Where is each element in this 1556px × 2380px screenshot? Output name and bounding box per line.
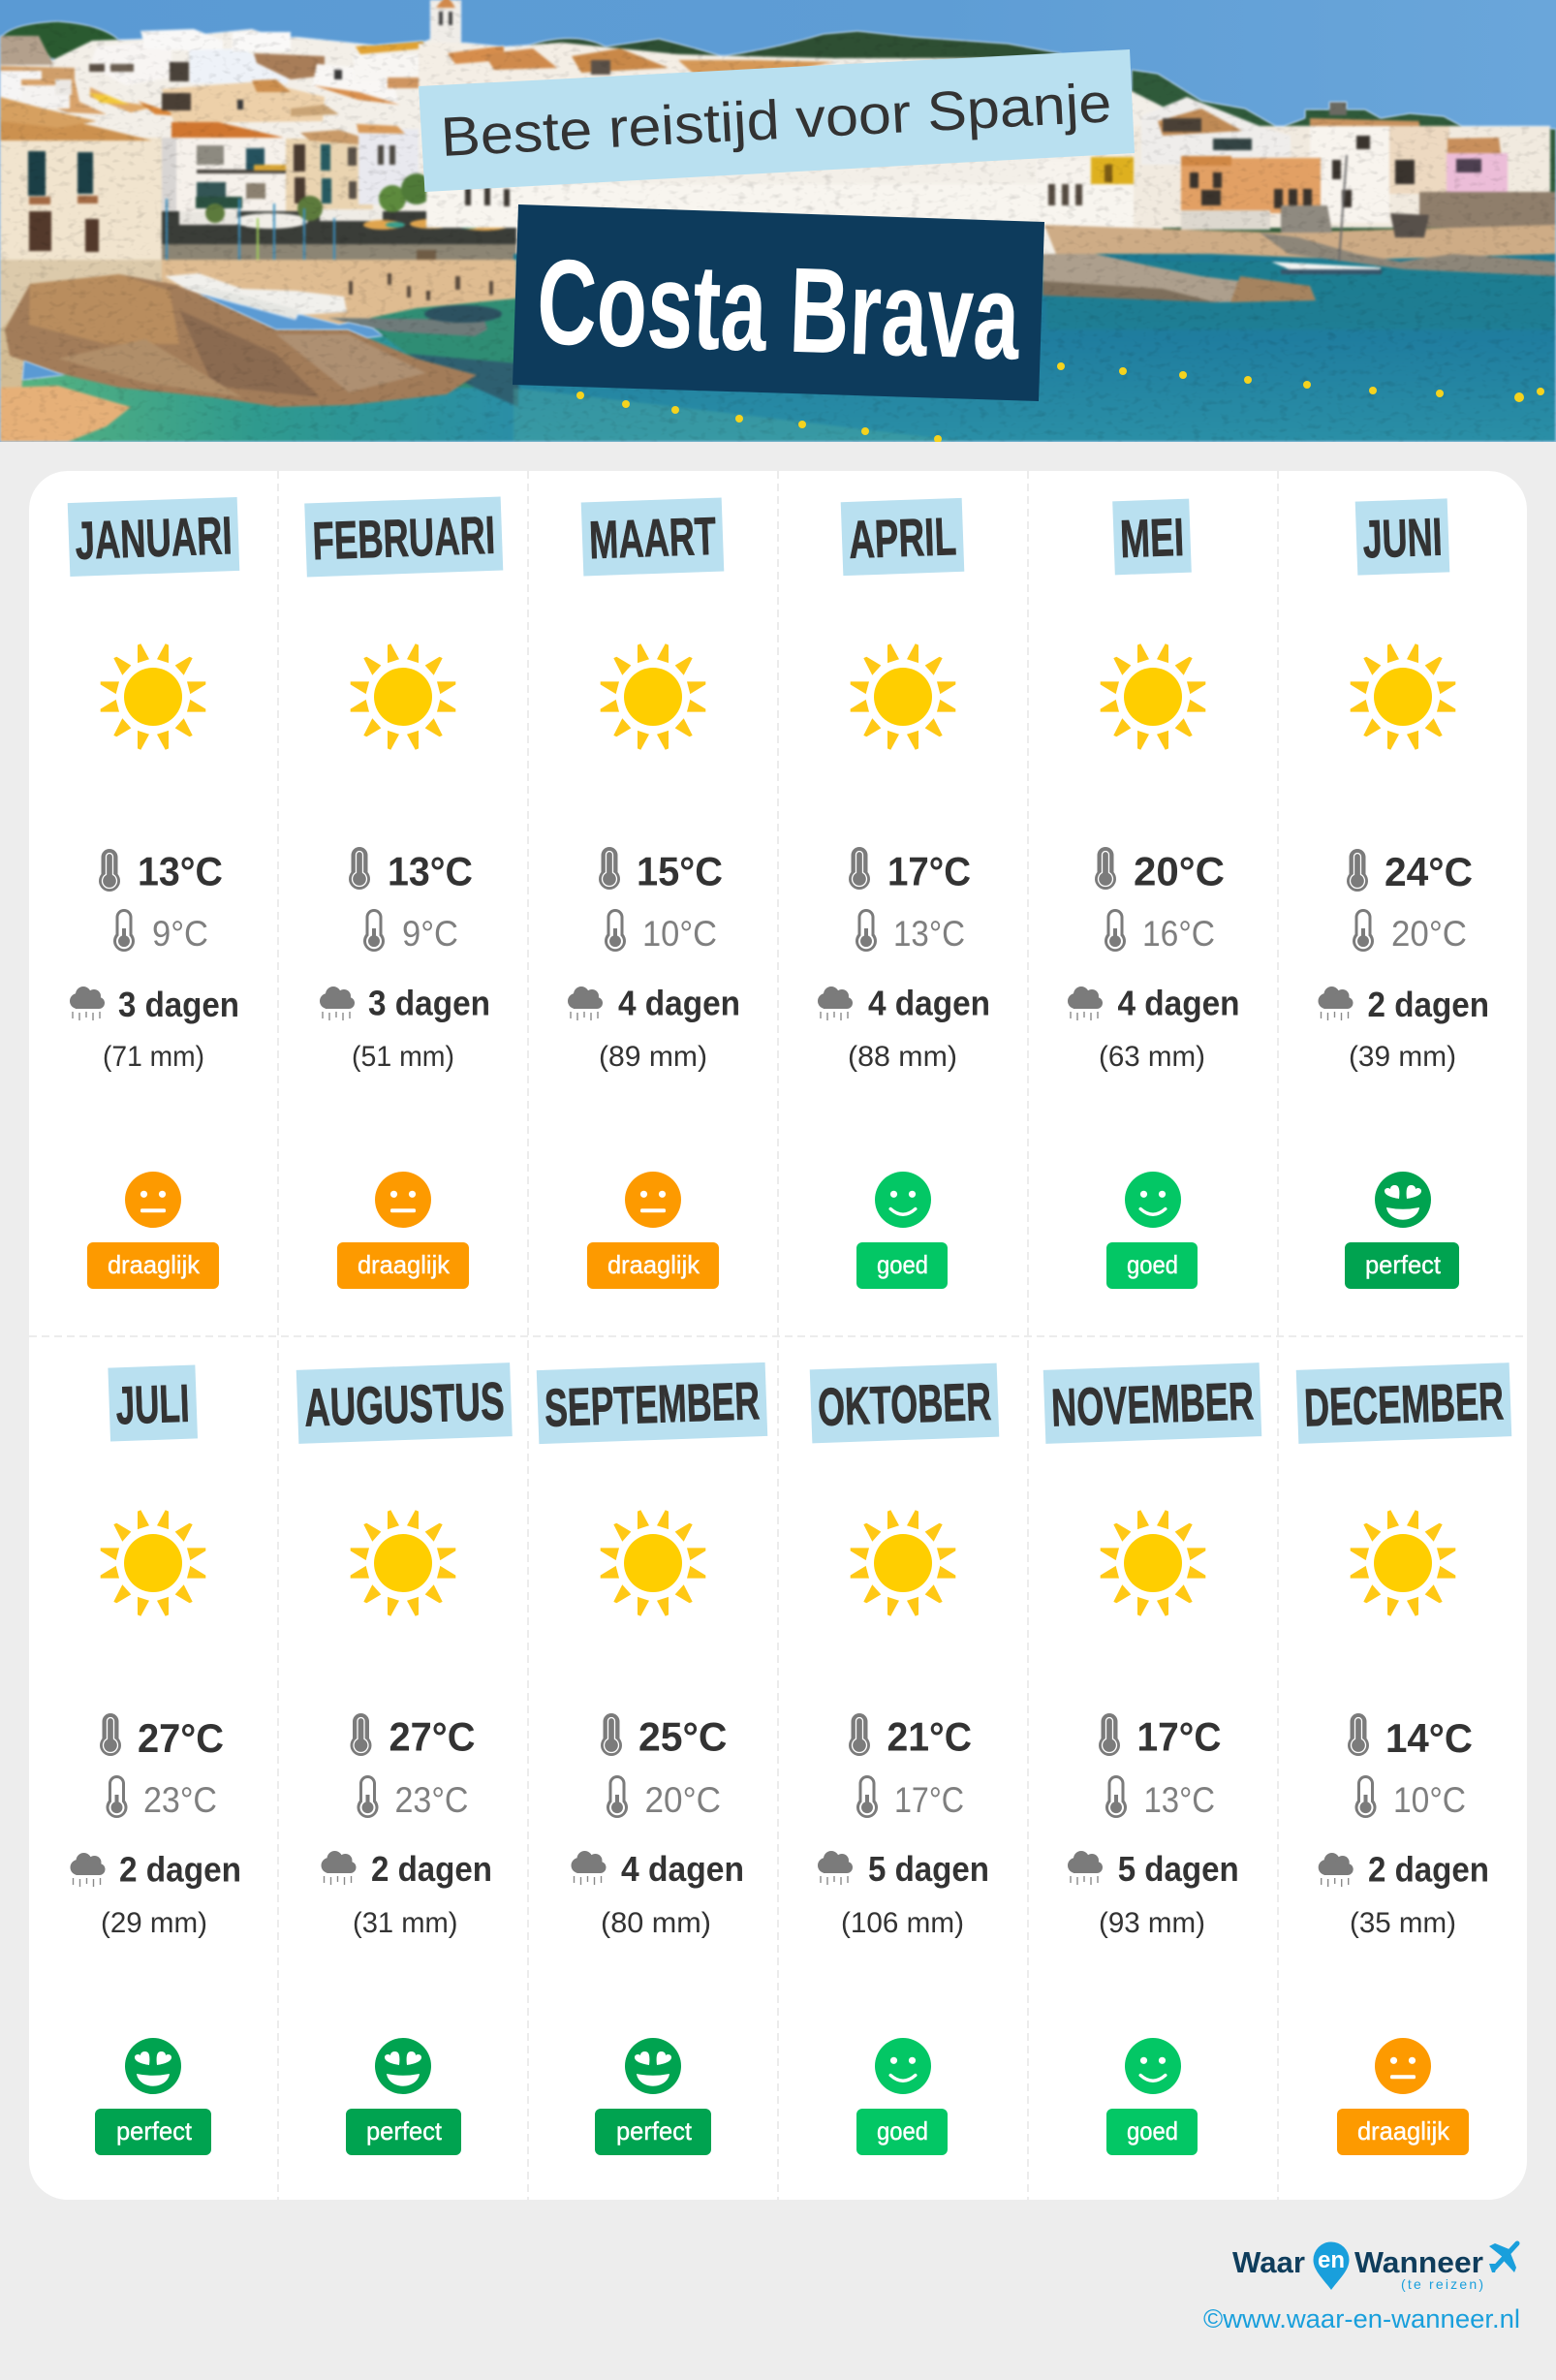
- rain days: [818, 1849, 989, 1889]
- max temperature: [349, 847, 473, 893]
- rain days: 4 dagen: [621, 1849, 744, 1889]
- rating: draaglijk: [1337, 2038, 1469, 2155]
- min temperature: 17°C: [894, 1780, 964, 1820]
- panel: februari: [304, 496, 503, 1289]
- month label: [1112, 499, 1192, 575]
- month label: MAART: [588, 506, 717, 570]
- rating: perfect: perfect: [116, 2116, 193, 2145]
- logo: Waar en Wanneer: [1232, 2242, 1517, 2292]
- panel: juni: [1318, 498, 1489, 1289]
- rainfall: (106 mm): [841, 1907, 964, 1939]
- rating: draaglijk: draaglijk: [1357, 2116, 1450, 2145]
- min temperature: [1354, 1775, 1466, 1820]
- month label: JANUARI: [75, 505, 233, 571]
- rain days: [322, 1849, 492, 1889]
- min temperature: [856, 1775, 964, 1820]
- max temperature: 13°C: [388, 849, 473, 893]
- icon: sun: [851, 643, 955, 750]
- max temperature: [849, 1713, 972, 1760]
- max temperature: 20°C: [1134, 849, 1225, 893]
- logo: Waar en Wanneer: Wanneer: [1354, 2245, 1483, 2279]
- rainfall: (51 mm): [352, 1041, 454, 1073]
- header photo: harbour of Calella on the Costa Brava: [0, 0, 1556, 443]
- min temperature: [605, 909, 717, 954]
- icon: sun: [851, 1510, 955, 1616]
- icon: sun: [351, 643, 455, 750]
- month label: [1043, 1362, 1261, 1444]
- min temperature: [363, 909, 458, 954]
- rating: goed: [1106, 2038, 1198, 2155]
- rain days: [568, 983, 740, 1023]
- rating: draaglijk: [87, 1172, 219, 1289]
- min temperature: 9°C: [402, 914, 458, 954]
- min temperature: [1105, 909, 1215, 954]
- min temperature: [107, 1775, 217, 1820]
- min temperature: 9°C: [152, 914, 208, 954]
- rain days: [70, 985, 239, 1024]
- min temperature: [607, 1775, 721, 1820]
- max temperature: 17°C: [887, 849, 971, 893]
- rain days: 4 dagen: [618, 983, 740, 1023]
- rainfall: (63 mm): [1099, 1041, 1205, 1073]
- logo: Waar en Wanneer: (te reizen): [1401, 2276, 1483, 2292]
- rating: draaglijk: draaglijk: [607, 1250, 700, 1279]
- website credit: ©www.waar-en-wanneer.nl: [1203, 2304, 1520, 2333]
- rain days: [70, 1850, 241, 1890]
- month label: JULI: [114, 1373, 191, 1435]
- month label: APRIL: [848, 506, 957, 570]
- rain days: 2 dagen: [1368, 1850, 1489, 1890]
- rating: goed: goed: [877, 2116, 928, 2145]
- panel: augustus: [296, 1362, 513, 2155]
- min temperature: [856, 909, 965, 954]
- max temperature: [601, 1713, 727, 1760]
- rain days: 2 dagen: [371, 1849, 492, 1889]
- month label: NOVEMBER: [1050, 1370, 1255, 1438]
- month label: OKTOBER: [817, 1371, 992, 1437]
- rain days: 4 dagen: [1118, 983, 1240, 1023]
- rainfall: (80 mm): [601, 1907, 711, 1939]
- panel: maart: [568, 497, 740, 1289]
- panel: januari: [68, 497, 239, 1289]
- min temperature: [1353, 909, 1467, 954]
- rain days: [572, 1849, 744, 1889]
- icon: sun: [101, 643, 205, 750]
- rainfall: (71 mm): [103, 1041, 204, 1073]
- rating: perfect: perfect: [1365, 1250, 1442, 1279]
- rating: goed: goed: [877, 1250, 928, 1279]
- rating: perfect: [595, 2038, 711, 2155]
- month label: [108, 1364, 198, 1442]
- panel: mei: [1068, 499, 1240, 1289]
- icon: sun: [1101, 1510, 1205, 1616]
- min temperature: 20°C: [1391, 914, 1467, 954]
- max temperature: [99, 849, 223, 893]
- icon: map pin: [1314, 2242, 1349, 2290]
- rating: goed: [1106, 1172, 1198, 1289]
- icon: sun: [351, 1510, 455, 1616]
- max temperature: 27°C: [138, 1715, 224, 1761]
- min temperature: [1105, 1775, 1215, 1820]
- title banner: Costa Brava: [535, 235, 1022, 386]
- rain days: [1319, 1850, 1489, 1890]
- rating: draaglijk: [337, 1172, 469, 1289]
- rain days: [1068, 983, 1240, 1023]
- panel: november: [1043, 1362, 1261, 2155]
- max temperature: [1347, 849, 1473, 894]
- rating: goed: goed: [1127, 2116, 1178, 2145]
- month label: [581, 497, 724, 577]
- icon: sun: [601, 1510, 705, 1616]
- min temperature: [113, 909, 208, 954]
- rainfall: (93 mm): [1099, 1907, 1205, 1939]
- icon: sun: [601, 643, 705, 750]
- rating: perfect: perfect: [616, 2116, 693, 2145]
- rain days: 5 dagen: [868, 1849, 989, 1889]
- max temperature: 24°C: [1385, 849, 1473, 894]
- panel: april: [818, 498, 990, 1289]
- min temperature: 20°C: [645, 1780, 721, 1820]
- month label: JUNI: [1361, 507, 1444, 569]
- icon: sun: [1351, 1510, 1455, 1616]
- rainfall: (88 mm): [848, 1041, 957, 1073]
- rainfall: (89 mm): [599, 1041, 707, 1073]
- logo: Waar en Wanneer: Waar: [1232, 2245, 1305, 2279]
- min temperature: [357, 1775, 469, 1820]
- rating: goed: [856, 2038, 948, 2155]
- rain days: [320, 983, 490, 1023]
- max temperature: [1099, 1713, 1221, 1760]
- icon: sun: [1351, 643, 1455, 750]
- rain days: [818, 983, 990, 1023]
- rain days: 4 dagen: [868, 983, 990, 1023]
- max temperature: [100, 1713, 224, 1761]
- rain days: 5 dagen: [1118, 1849, 1239, 1889]
- rain days: 3 dagen: [368, 983, 490, 1023]
- rain days: [1068, 1849, 1239, 1889]
- rainfall: (39 mm): [1349, 1041, 1456, 1073]
- max temperature: 21°C: [887, 1713, 972, 1760]
- panel: december: [1296, 1362, 1511, 2155]
- rating: draaglijk: draaglijk: [358, 1250, 451, 1279]
- subtitle banner: Beste reistijd voor Spanje: [439, 72, 1113, 169]
- max temperature: 13°C: [138, 849, 223, 893]
- subtitle banner: [419, 49, 1135, 192]
- max temperature: [849, 847, 971, 893]
- min temperature: 16°C: [1142, 914, 1215, 954]
- panel: calendar card: [29, 471, 1527, 2200]
- rain days: 2 dagen: [119, 1850, 241, 1890]
- month label: [537, 1362, 767, 1444]
- month label: AUGUSTUS: [303, 1370, 506, 1438]
- rain days: 2 dagen: [1368, 985, 1489, 1024]
- min temperature: 13°C: [1143, 1780, 1215, 1820]
- rating: draaglijk: [587, 1172, 719, 1289]
- icon: plane: [1489, 2243, 1517, 2272]
- icon: sun: [1101, 643, 1205, 750]
- panel: oktober: [810, 1363, 999, 2155]
- month label: [296, 1362, 513, 1444]
- rating: goed: [856, 1172, 948, 1289]
- min temperature: 23°C: [143, 1780, 217, 1820]
- max temperature: 17°C: [1137, 1713, 1221, 1760]
- month label: FEBRUARI: [312, 505, 496, 571]
- month label: [841, 498, 964, 576]
- min temperature: 10°C: [1393, 1780, 1466, 1820]
- rainfall: (31 mm): [353, 1907, 457, 1939]
- panel: september: [537, 1362, 767, 2155]
- rating: perfect: [346, 2038, 461, 2155]
- max temperature: 25°C: [638, 1713, 727, 1760]
- max temperature: 27°C: [389, 1713, 475, 1760]
- month label: [1355, 498, 1449, 576]
- rain days: [1318, 985, 1489, 1024]
- month label: [304, 496, 503, 578]
- rating: draaglijk: draaglijk: [108, 1250, 201, 1279]
- rain days: 3 dagen: [118, 985, 239, 1024]
- rating: perfect: perfect: [366, 2116, 443, 2145]
- max temperature: 15°C: [637, 849, 723, 893]
- icon: sun: [101, 1510, 205, 1616]
- title banner: [513, 204, 1044, 401]
- min temperature: 10°C: [642, 914, 717, 954]
- max temperature: [1095, 847, 1225, 893]
- month label: [68, 497, 239, 577]
- rating: perfect: [1345, 1172, 1459, 1289]
- rainfall: (35 mm): [1350, 1907, 1456, 1939]
- panel: juli: [70, 1364, 241, 2155]
- logo: Waar en Wanneer: en: [1318, 2247, 1345, 2273]
- max temperature: [1348, 1713, 1473, 1761]
- min temperature: 23°C: [395, 1780, 469, 1820]
- max temperature: 14°C: [1385, 1715, 1473, 1761]
- month label: MEI: [1119, 507, 1185, 569]
- max temperature: [351, 1713, 475, 1760]
- month label: [810, 1363, 999, 1443]
- min temperature: 13°C: [893, 914, 965, 954]
- rating: goed: goed: [1127, 1250, 1178, 1279]
- month label: SEPTEMBER: [544, 1370, 761, 1438]
- rainfall: (29 mm): [101, 1907, 207, 1939]
- max temperature: [599, 847, 723, 893]
- rating: perfect: [95, 2038, 211, 2155]
